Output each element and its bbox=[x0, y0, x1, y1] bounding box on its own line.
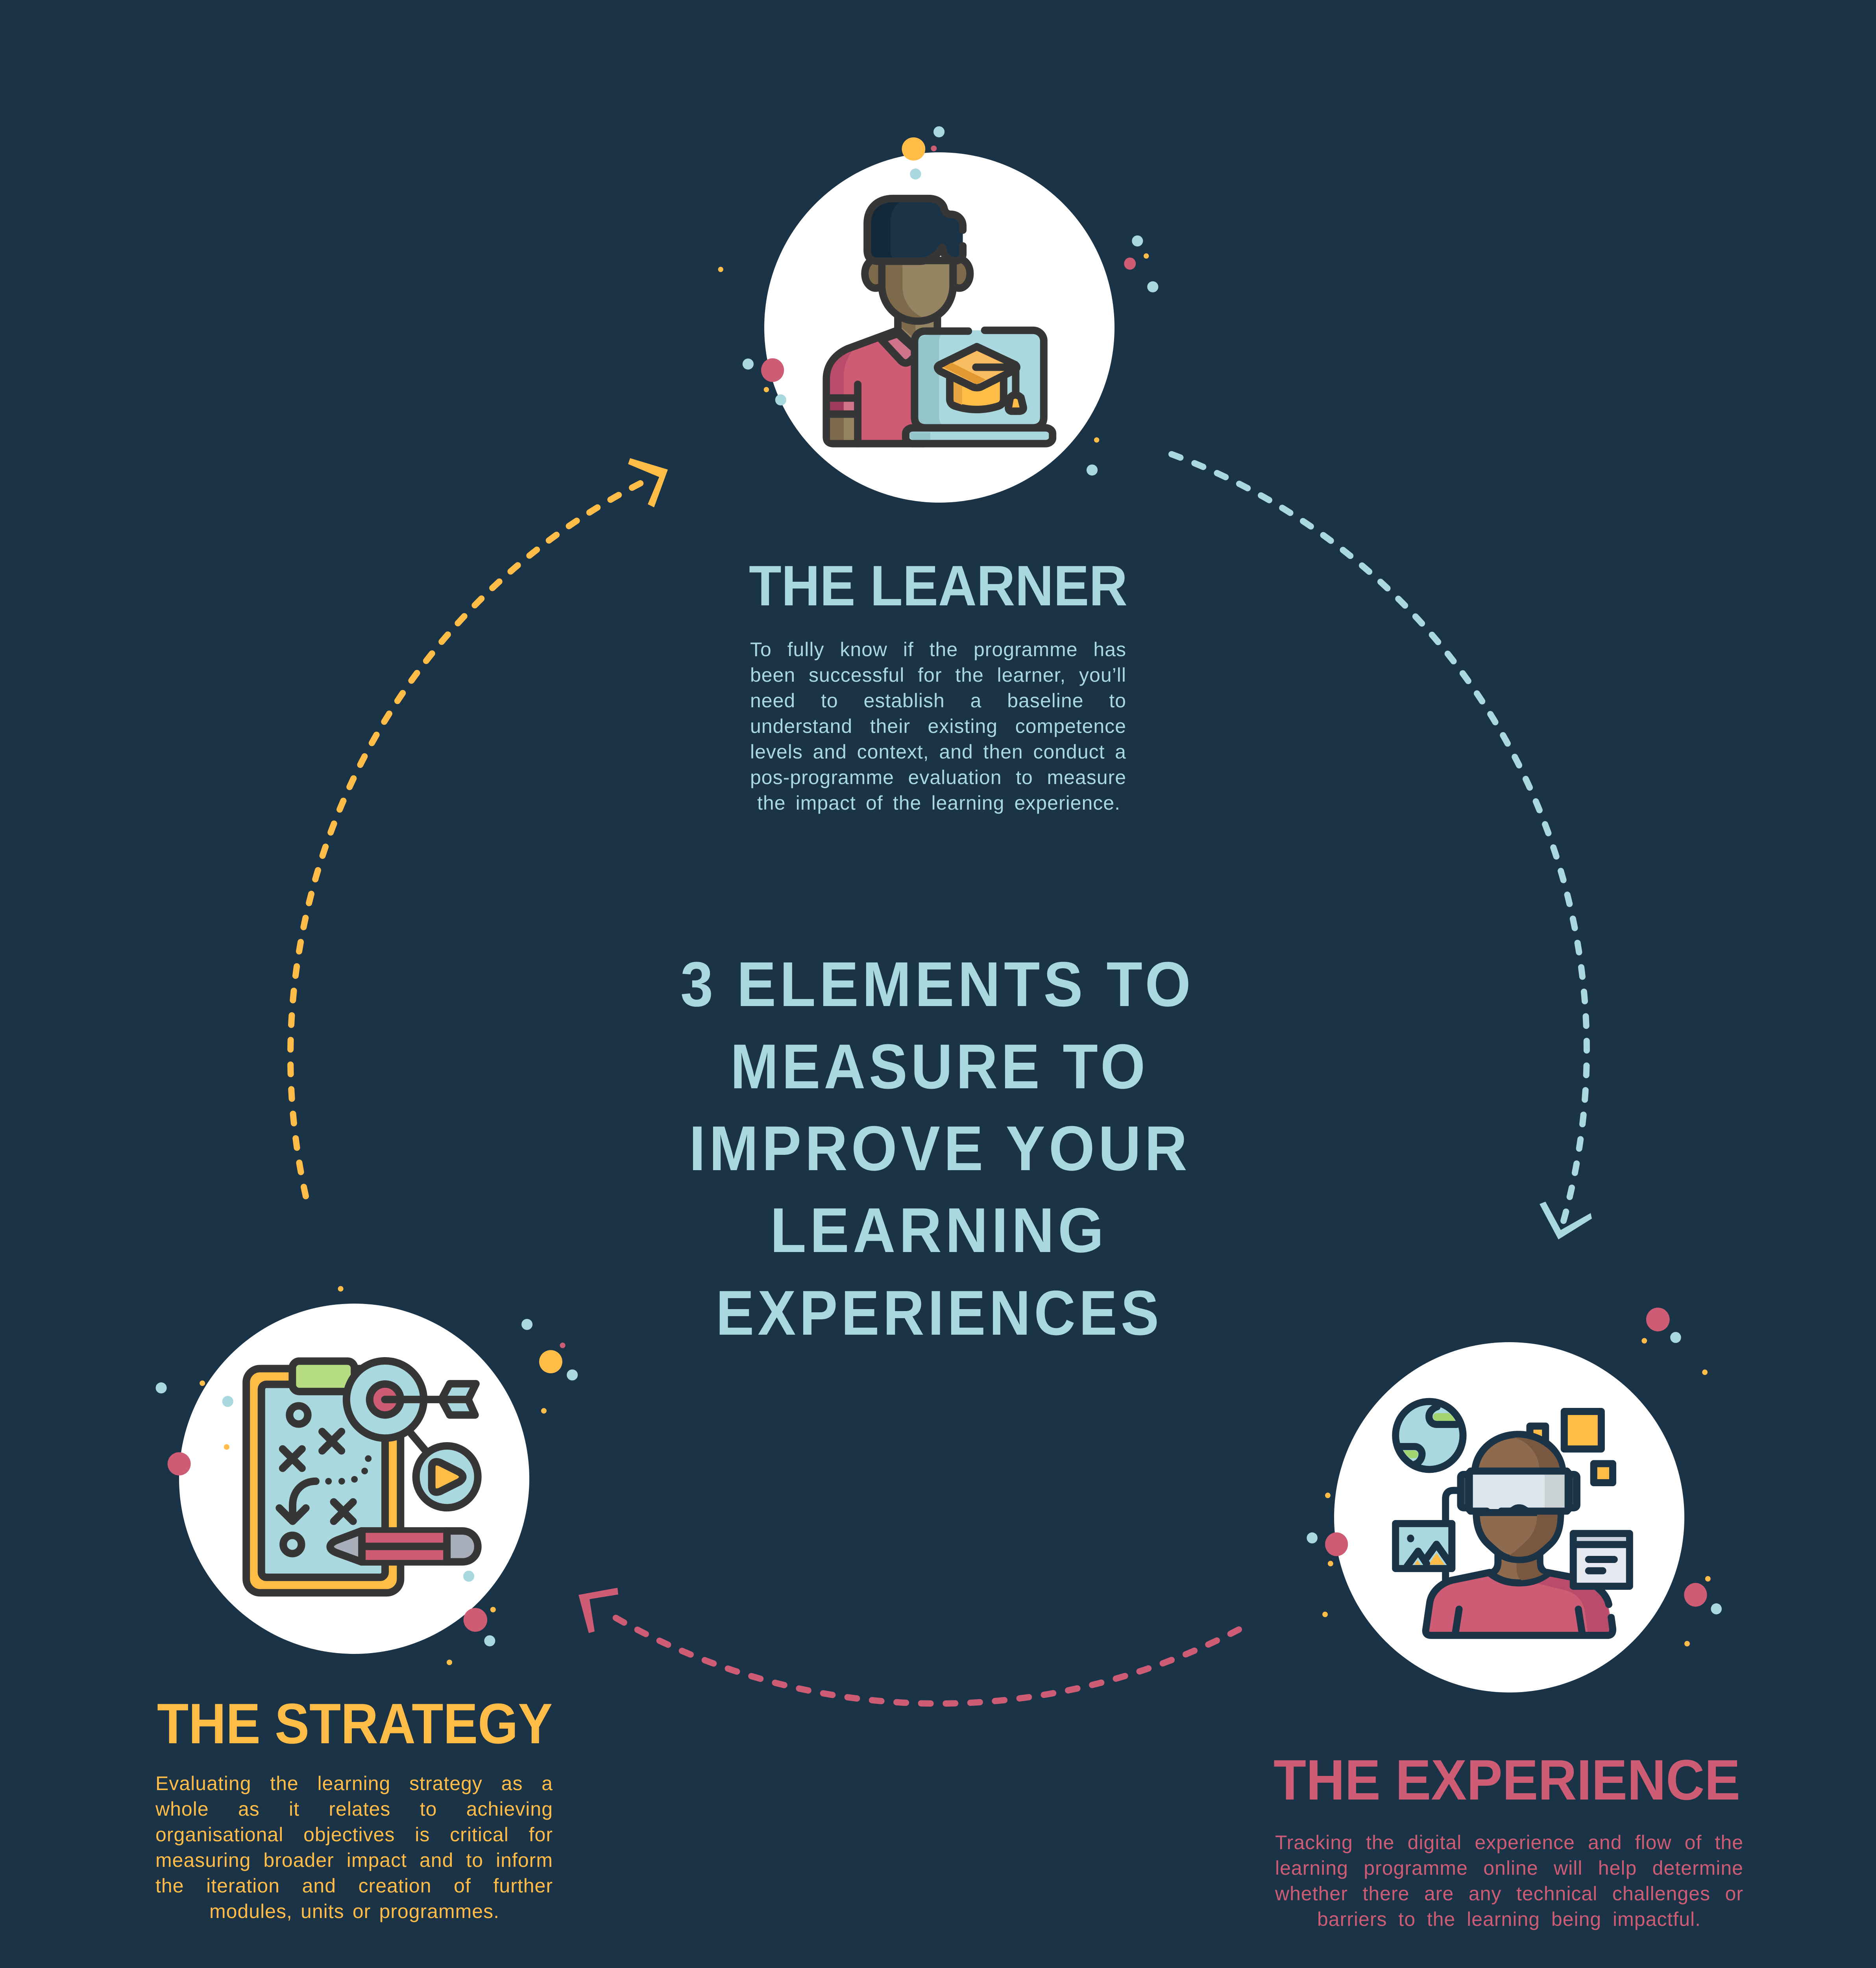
panel: experience circle and icon bbox=[1307, 1308, 1722, 1692]
decorative dots: experience bbox=[1307, 1308, 1722, 1646]
text block: strategy description bbox=[155, 1771, 553, 1924]
title: EXPERIENCES bbox=[716, 1278, 1163, 1348]
text block: experience description: barriers to the learning being impactful. bbox=[1317, 1908, 1701, 1930]
text block: learner description: need to establish a baseline to bbox=[750, 690, 1126, 712]
title: LEARNING bbox=[770, 1195, 1107, 1266]
text block: learner description: understand their existing competence bbox=[750, 715, 1126, 737]
title: MEASURE TO bbox=[730, 1031, 1149, 1102]
icon: learner with laptop and graduation cap bbox=[826, 198, 1053, 444]
text block: learner description: To fully know if the programme has bbox=[750, 638, 1126, 660]
text block: strategy description: modules, units or programmes. bbox=[209, 1900, 499, 1922]
icon: person with VR headset bbox=[1395, 1402, 1630, 1635]
text block: strategy description: whole as it relates to achieving bbox=[155, 1798, 553, 1820]
title: 3 ELEMENTS TO bbox=[680, 949, 1194, 1020]
panel: learner circle and icon bbox=[718, 126, 1158, 503]
text block: strategy description: organisational objectives is critical for bbox=[155, 1824, 553, 1846]
icon: clipboard plan, target and pencil bbox=[246, 1361, 478, 1593]
panel: strategy circle and icon bbox=[156, 1286, 578, 1665]
text block: experience description bbox=[1275, 1830, 1743, 1932]
text block: learner description bbox=[750, 637, 1126, 816]
text block: learner description: levels and context, and then conduct a bbox=[750, 741, 1126, 763]
text block: experience description: learning programme online will help determine bbox=[1275, 1857, 1743, 1879]
title bbox=[680, 949, 1194, 1348]
arrow: learner to experience bbox=[1172, 454, 1592, 1239]
text block: learner description: the impact of the learning experience. bbox=[757, 792, 1120, 814]
title: IMPROVE YOUR bbox=[689, 1113, 1191, 1184]
decorative dots: learner bbox=[718, 126, 1158, 475]
arrow: experience to strategy bbox=[579, 1588, 1239, 1704]
heading: the strategy: THE STRATEGY bbox=[157, 1692, 553, 1755]
arrow: strategy to learner bbox=[290, 458, 668, 1196]
text block: strategy description: the iteration and creation of further bbox=[155, 1875, 553, 1897]
heading: the experience: THE EXPERIENCE bbox=[1273, 1748, 1740, 1812]
text block: strategy description: Evaluating the learning strategy as a bbox=[155, 1772, 553, 1794]
text block: strategy description: measuring broader impact and to inform bbox=[155, 1849, 553, 1871]
text block: learner description: pos-programme evaluation to measure bbox=[750, 766, 1126, 788]
decorative dots: strategy bbox=[156, 1286, 578, 1665]
text block: experience description: Tracking the digital experience and flow of the bbox=[1275, 1831, 1743, 1853]
heading: the learner: THE LEARNER bbox=[749, 554, 1127, 618]
text block: experience description: whether there are any technical challenges or bbox=[1275, 1883, 1743, 1905]
text block: learner description: been successful for the learner, you’ll bbox=[750, 664, 1126, 686]
